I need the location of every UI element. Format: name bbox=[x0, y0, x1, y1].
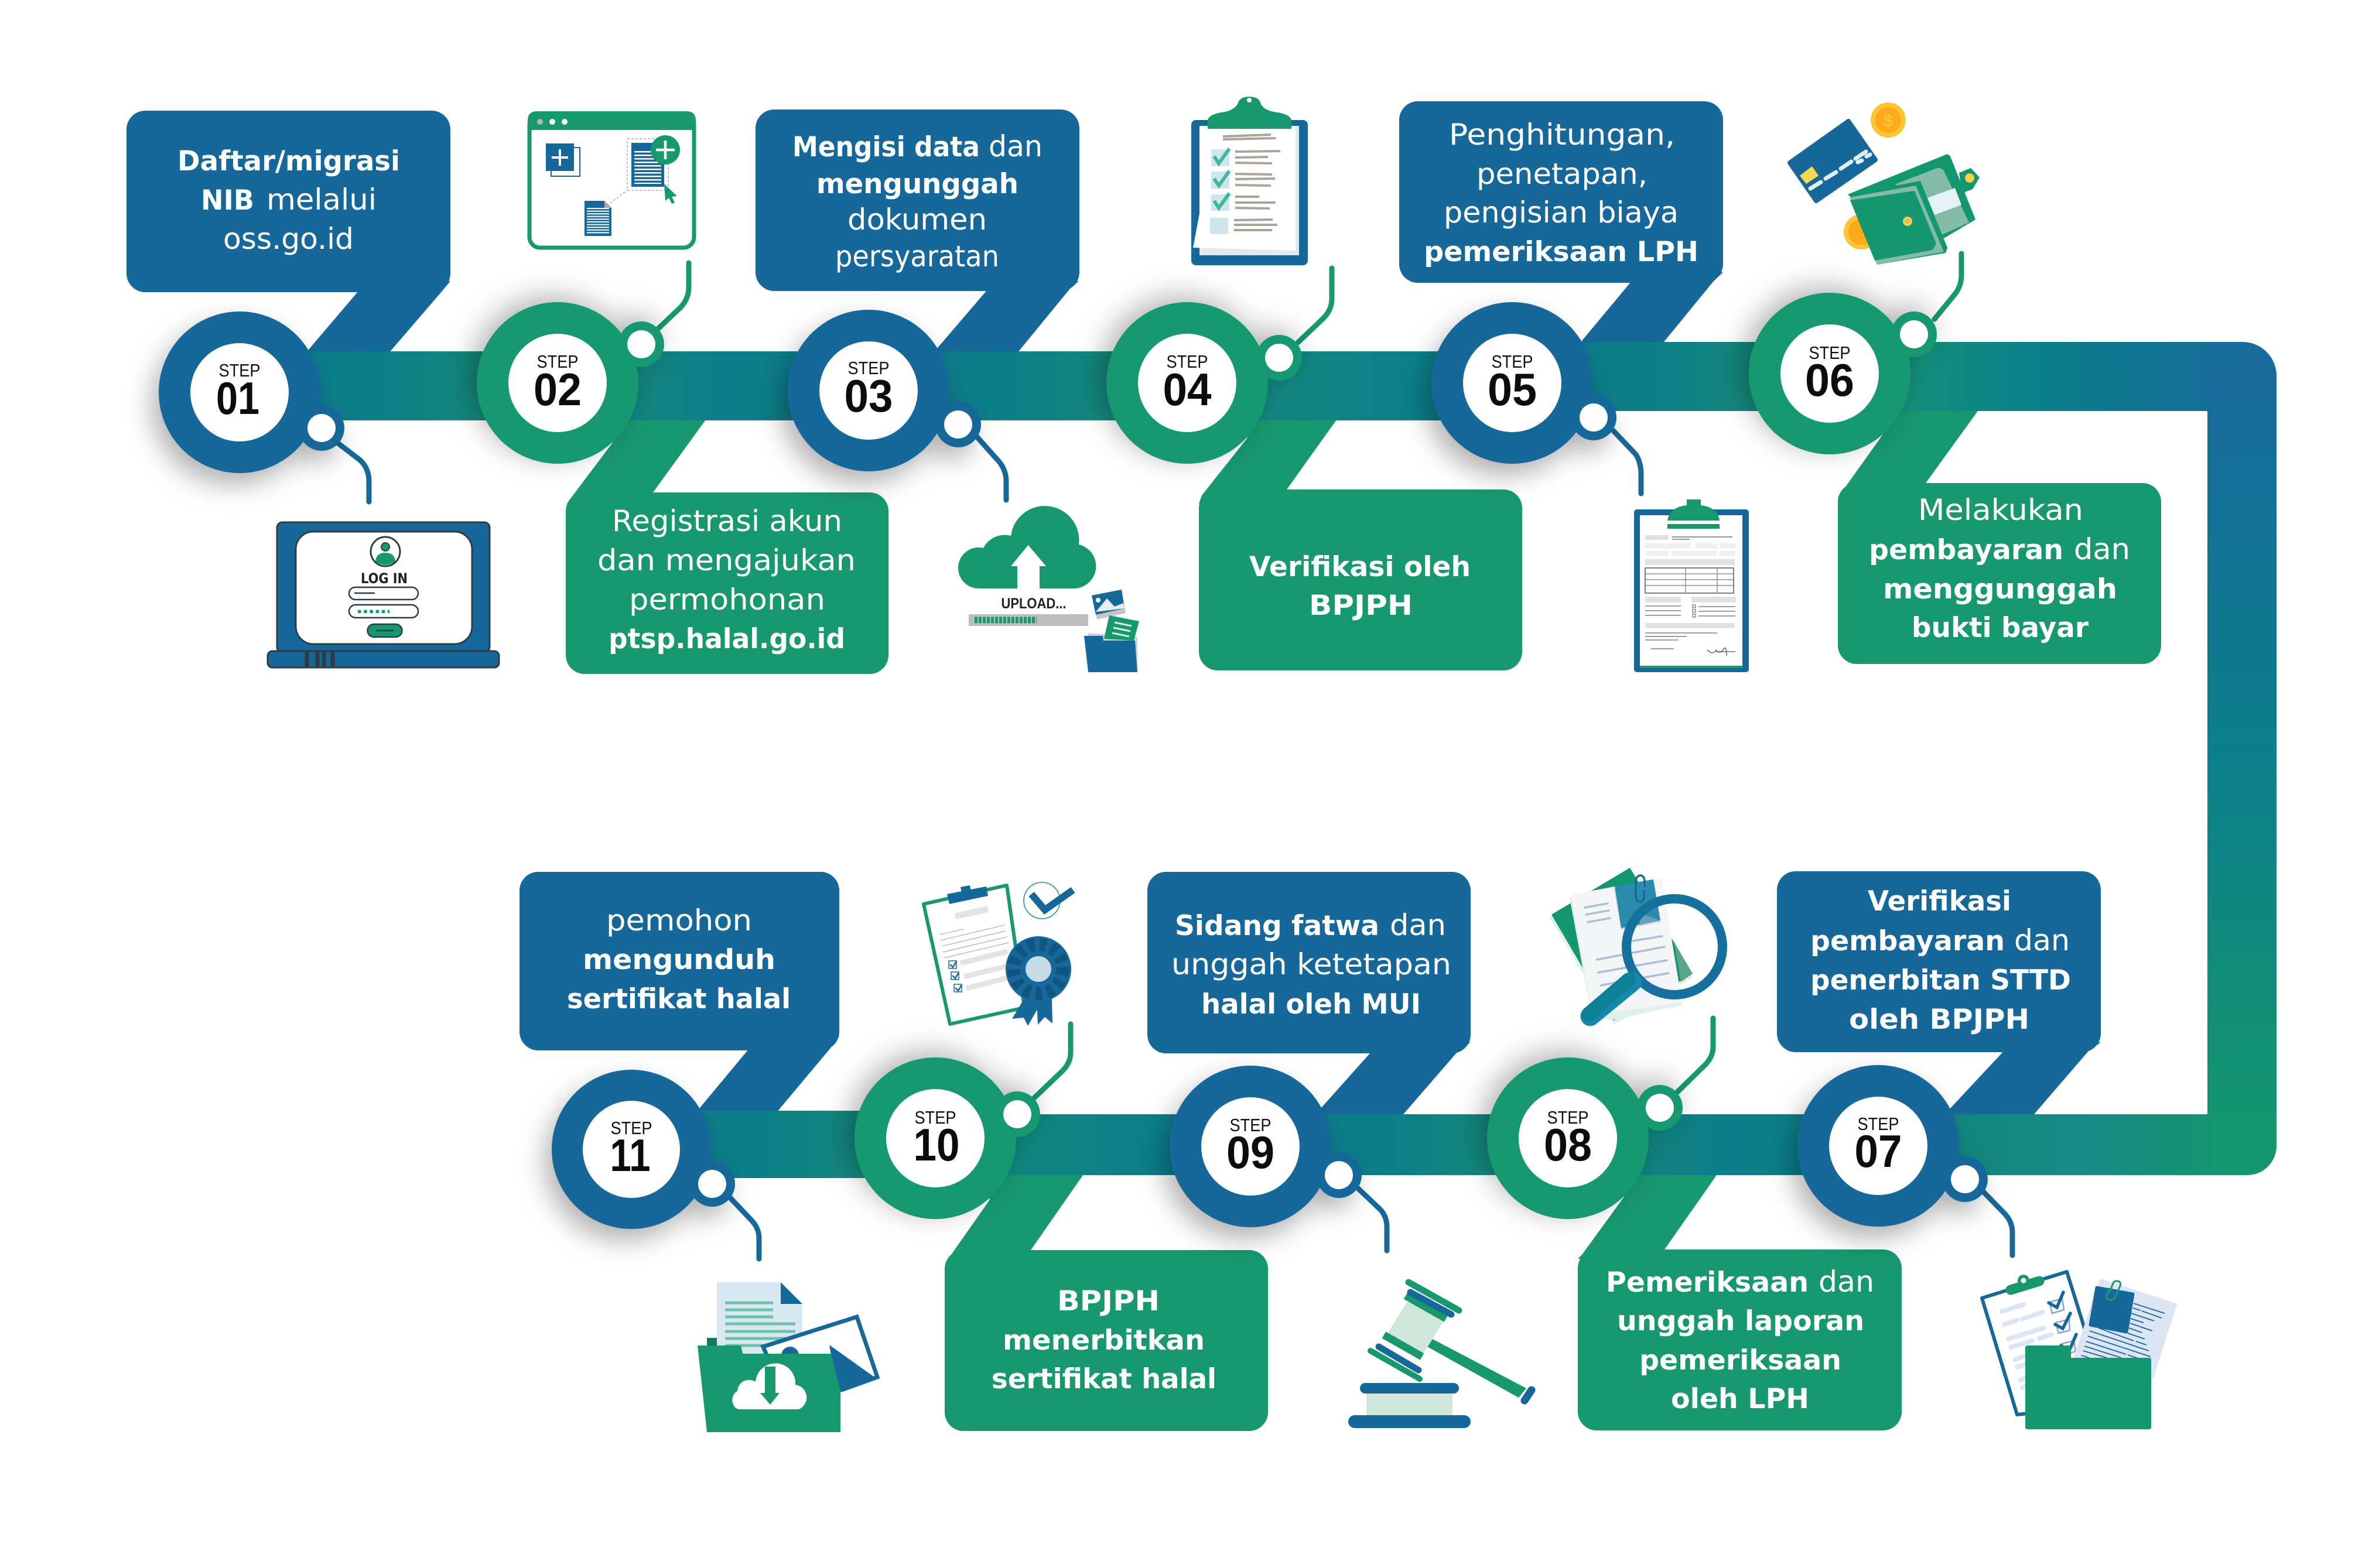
icon: folder with cloud download bbox=[698, 1282, 877, 1432]
callout: step 02: dan mengajukan bbox=[597, 543, 856, 577]
step 07 node bbox=[1797, 1065, 2012, 1255]
step 04 node: STEP bbox=[1167, 351, 1208, 372]
step 10 node: STEP bbox=[915, 1107, 956, 1128]
callout: step 01: Daftar/migrasi bbox=[177, 145, 400, 177]
step 06 node: STEP bbox=[1809, 343, 1851, 363]
callout: step 03: Mengisi data bbox=[792, 131, 980, 163]
icon: cloud upload: UPLOAD... bbox=[1002, 595, 1066, 612]
callout: step 02: ptsp.halal.go.id bbox=[609, 623, 845, 655]
callout: step 04: BPJPH bbox=[1309, 590, 1413, 622]
callout: step 09: Sidang fatwa bbox=[1175, 910, 1379, 942]
callout: step 10: BPJPH bbox=[1057, 1285, 1160, 1317]
callout: step 11: sertifikat halal bbox=[567, 983, 791, 1015]
step 09 node bbox=[1170, 1066, 1387, 1251]
callout: step 08: Pemeriksaan bbox=[1606, 1266, 1809, 1299]
callout: step 11: mengunduh bbox=[583, 944, 775, 976]
callout: step 03: dokumen bbox=[847, 203, 987, 237]
callout: step 08: dan bbox=[1819, 1265, 1874, 1299]
process path band bbox=[240, 342, 2277, 1178]
callout: step 07: Verifikasi bbox=[1868, 885, 2011, 917]
callout: step 09: unggah ketetapan bbox=[1171, 947, 1451, 981]
callout: step 07: dan bbox=[2014, 923, 2070, 957]
step 08 node: 08 bbox=[1544, 1119, 1592, 1170]
icon: magnifier over papers bbox=[1550, 868, 1722, 1025]
icon: wallet, card and coins bbox=[1790, 102, 1980, 265]
callout: step 09: halal oleh MUI bbox=[1201, 988, 1421, 1021]
callout: step 07: pembayaran bbox=[1810, 925, 2005, 957]
step 10 node bbox=[855, 1024, 1071, 1219]
callout: step 02: Registrasi akun bbox=[612, 504, 842, 538]
callout: step 06: Melakukan bbox=[1918, 493, 2083, 527]
step 01 node: STEP bbox=[219, 360, 260, 381]
step 03 node: STEP bbox=[848, 358, 889, 378]
step 04 node bbox=[1106, 268, 1332, 464]
step 09 node: STEP bbox=[1230, 1115, 1271, 1135]
step 05 node bbox=[1431, 302, 1641, 494]
callout: step 05: penetapan, bbox=[1476, 157, 1648, 191]
callout: step 06: menggunggah bbox=[1883, 573, 2117, 605]
icon: documents with folder bbox=[1982, 1272, 2176, 1429]
callout: step 01: NIB bbox=[201, 184, 254, 217]
step 02 node bbox=[477, 263, 689, 464]
step 09 node: 09 bbox=[1226, 1127, 1274, 1178]
icon: wallet, card and coins: $ bbox=[1884, 111, 1893, 131]
callout: step 06 bbox=[1838, 407, 2161, 664]
callout: step 11: pemohon bbox=[606, 903, 752, 937]
callout: step 09: dan bbox=[1390, 908, 1446, 942]
step 02 node: STEP bbox=[536, 351, 579, 372]
icon: browser window with documents bbox=[528, 111, 696, 248]
step 04 node: 04 bbox=[1163, 364, 1211, 415]
step 06 node bbox=[1749, 254, 1961, 454]
callout: step 08 bbox=[1578, 1171, 1902, 1430]
callout: step 01: melalui bbox=[266, 183, 377, 217]
step 01 node bbox=[159, 311, 369, 502]
callout: step 07: oleh BPJPH bbox=[1849, 1004, 2029, 1036]
callout: step 05 bbox=[1399, 101, 1723, 345]
icon: checklist clipboard bbox=[1191, 97, 1308, 265]
icon: laptop log in bbox=[268, 522, 499, 667]
step 08 node bbox=[1487, 1018, 1713, 1219]
callout: step 01 bbox=[127, 111, 450, 354]
callout: step 08: unggah laporan bbox=[1617, 1305, 1864, 1337]
step 05 node: STEP bbox=[1491, 351, 1533, 372]
callout: step 03 bbox=[756, 109, 1079, 354]
callout: step 06: pembayaran bbox=[1869, 534, 2063, 566]
callout: step 10: sertifikat halal bbox=[992, 1363, 1216, 1395]
step 08 node: STEP bbox=[1547, 1107, 1588, 1128]
callout: step 08: pemeriksaan bbox=[1639, 1344, 1841, 1377]
callout: step 07 bbox=[1777, 871, 2101, 1118]
callout: step 03: dan bbox=[989, 129, 1043, 163]
step 06 node: 06 bbox=[1805, 354, 1854, 406]
callout: step 05: pemeriksaan LPH bbox=[1424, 236, 1698, 268]
callout: step 04: Verifikasi oleh bbox=[1249, 551, 1471, 583]
callout: step 02: permohonan bbox=[629, 583, 825, 617]
callout: step 07: penerbitan STTD bbox=[1810, 964, 2071, 997]
step 07 node: STEP bbox=[1858, 1114, 1899, 1134]
callout: step 01: oss.go.id bbox=[223, 222, 354, 256]
callout: step 05: pengisian biaya bbox=[1444, 196, 1679, 230]
callout: step 04 bbox=[1199, 416, 1522, 670]
step 01 node: 01 bbox=[216, 372, 259, 424]
step 02 node: 02 bbox=[534, 364, 582, 415]
callout: step 03: mengunggah bbox=[816, 168, 1018, 200]
step 11 node: STEP bbox=[610, 1118, 652, 1138]
callout: step 05: Penghitungan, bbox=[1449, 118, 1675, 152]
callout: step 02 bbox=[566, 416, 888, 674]
icon: laptop log in: LOG IN bbox=[361, 570, 408, 587]
callout: step 10: menerbitkan bbox=[1003, 1324, 1205, 1357]
callout: step 06: bukti bayar bbox=[1912, 612, 2089, 644]
step 03 node: 03 bbox=[845, 370, 893, 422]
step 07 node: 07 bbox=[1854, 1125, 1902, 1177]
icon: gavel bbox=[1348, 1282, 1532, 1428]
step 11 node bbox=[552, 1070, 759, 1259]
icon: form document clipboard bbox=[1634, 499, 1749, 672]
callout: step 09 bbox=[1147, 872, 1471, 1118]
callout: step 06: dan bbox=[2074, 532, 2130, 566]
step 10 node: 10 bbox=[914, 1119, 959, 1170]
icon: cloud upload bbox=[958, 506, 1139, 672]
callout: step 11 bbox=[519, 872, 839, 1112]
step 11 node: 11 bbox=[610, 1129, 650, 1181]
callout: step 10 bbox=[945, 1171, 1268, 1431]
step 03 node bbox=[788, 310, 1006, 500]
step 05 node: 05 bbox=[1488, 364, 1537, 415]
callout: step 03: persyaratan bbox=[835, 239, 999, 273]
icon: certificate with rosette bbox=[924, 882, 1073, 1026]
callout: step 08: oleh LPH bbox=[1671, 1383, 1809, 1415]
